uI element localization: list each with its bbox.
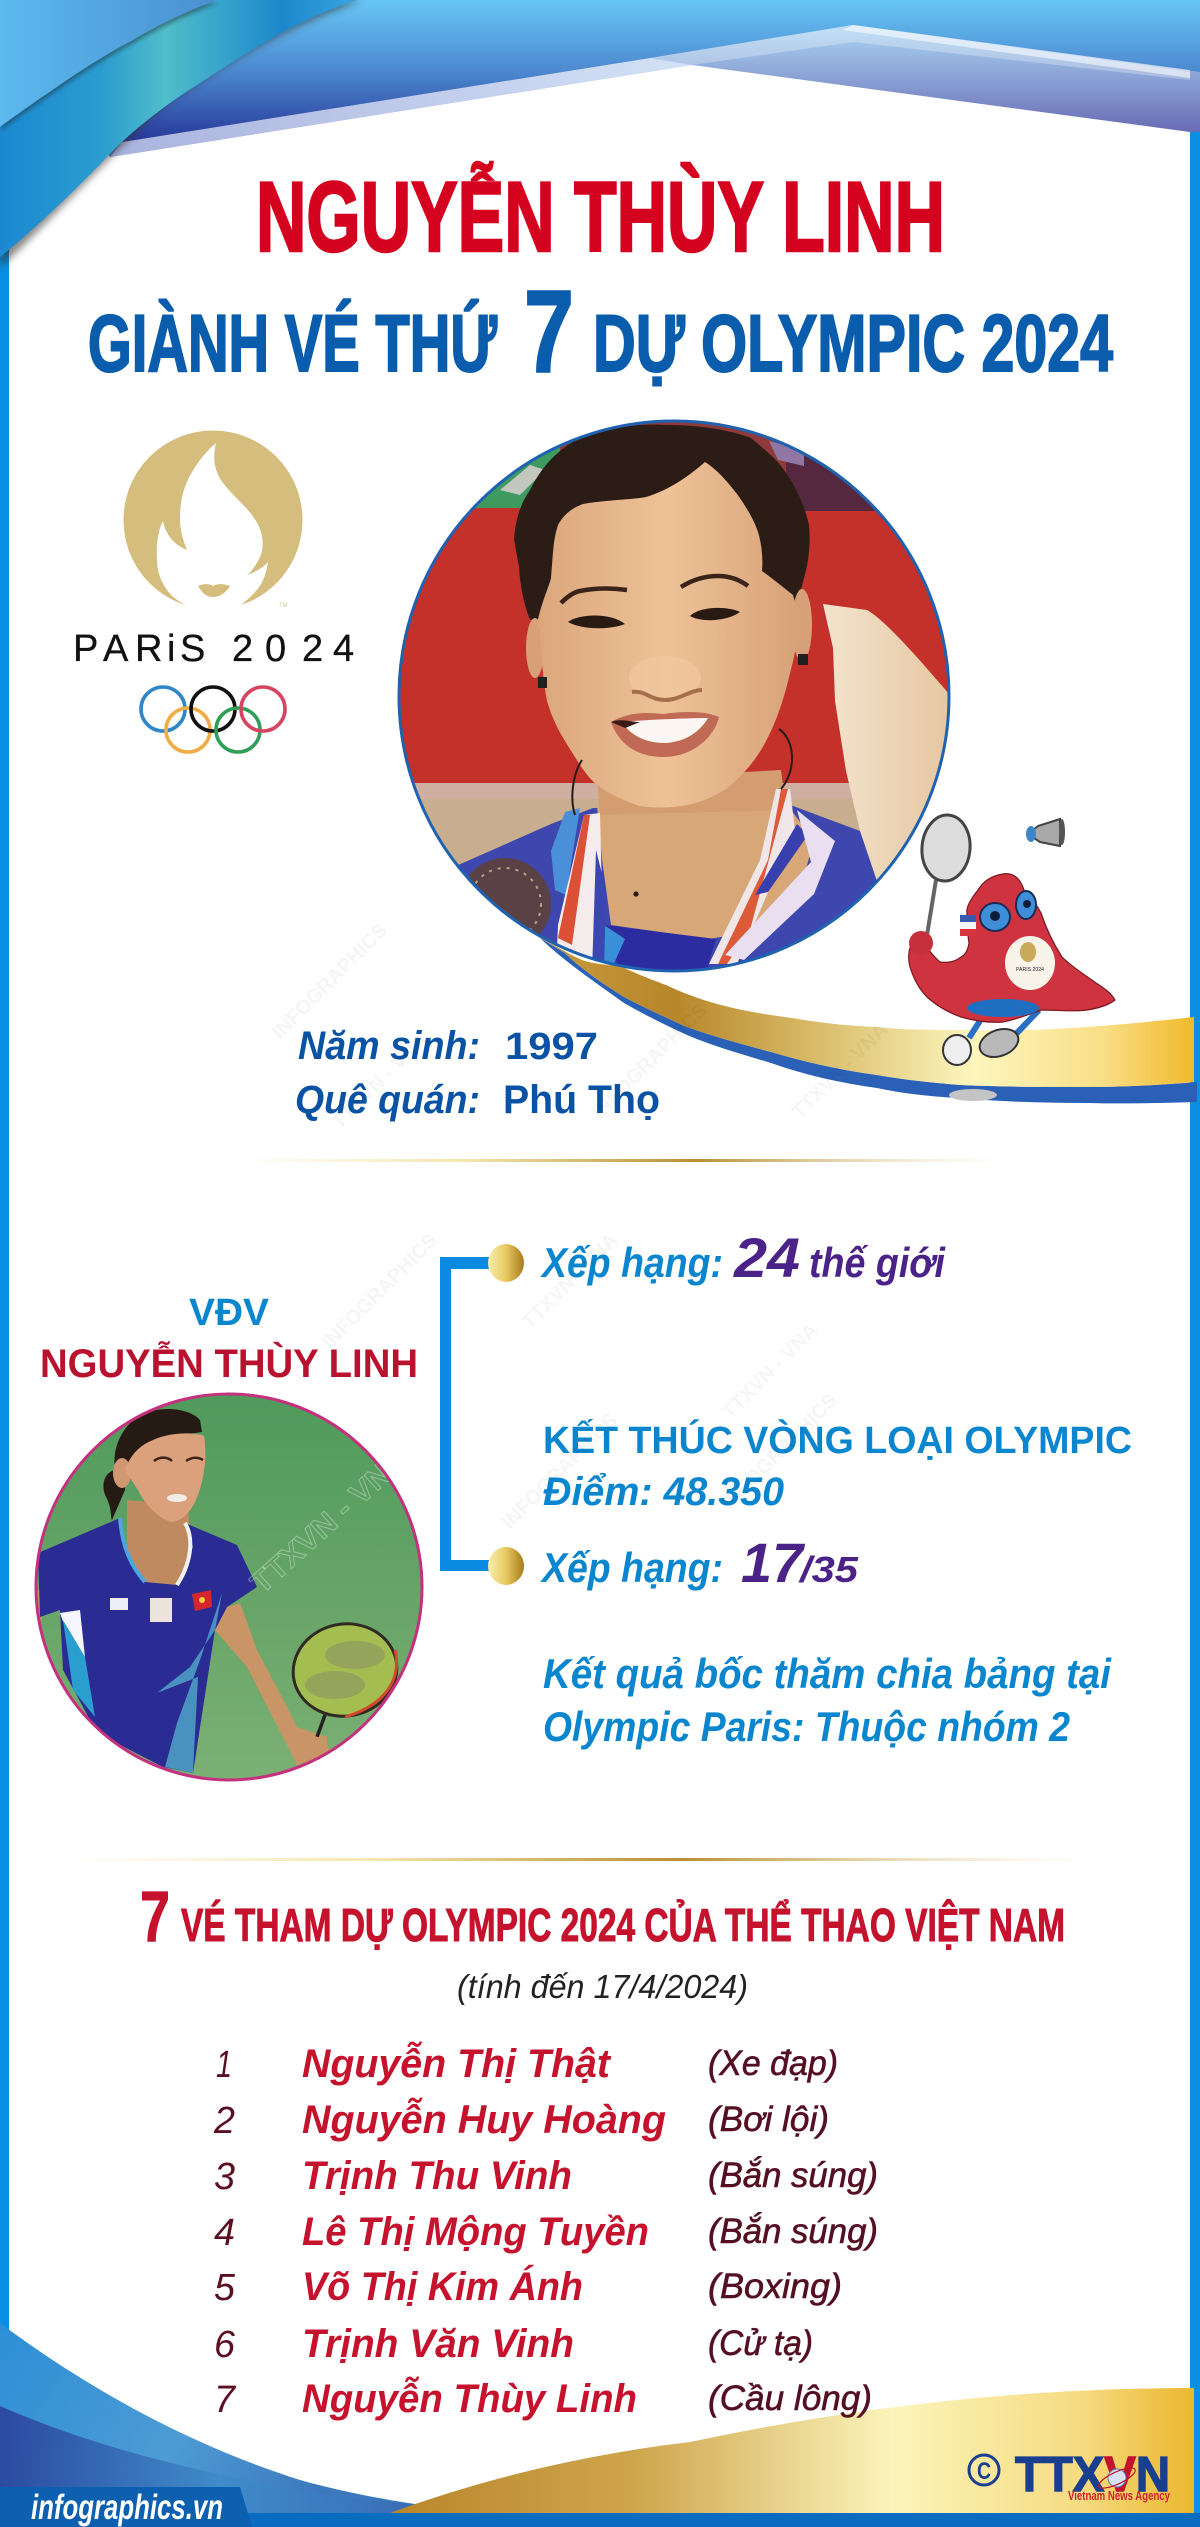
cockade — [960, 915, 976, 936]
watermarks: INFOGRAPHICS — [498, 1410, 622, 1534]
row 3: Trịnh Thu Vinh — [302, 2154, 572, 2198]
qualifying result: /35 — [798, 1549, 859, 1590]
draw result — [543, 1650, 1112, 1750]
row 5: 5 — [214, 2267, 236, 2309]
athlete heading — [40, 1292, 418, 1386]
watermarks — [268, 920, 892, 1534]
personal information: Quê quán: — [295, 1078, 480, 1122]
row 6 — [214, 2322, 813, 2366]
qualifying result: Điểm: 48.350 — [543, 1470, 784, 1514]
row 4: Lê Thị Mộng Tuyền — [302, 2210, 649, 2254]
row 7: Nguyễn Thùy Linh — [302, 2375, 637, 2421]
list heading: (tính đến 17/4/2024) — [457, 1968, 748, 2005]
row 5 — [214, 2264, 842, 2309]
list heading — [140, 1878, 1065, 2005]
row 4 — [214, 2210, 878, 2254]
portrait photo — [399, 421, 949, 972]
qualifying result — [540, 1418, 1132, 1594]
row 2: Nguyễn Huy Hoàng — [302, 2096, 666, 2142]
gold swoosh with blue edge — [540, 938, 1197, 1103]
title — [88, 161, 1113, 397]
mascot: Phryge with racket — [909, 813, 1115, 1065]
body — [909, 874, 1115, 1022]
bracket connector — [440, 1244, 524, 1585]
divider — [233, 1159, 1006, 1162]
athletes list — [213, 2040, 878, 2421]
watermarks: TTXVN - VNA — [718, 1319, 822, 1424]
row 6: (Cử tạ) — [708, 2324, 813, 2363]
watermarks: INFOGRAPHICS — [268, 920, 392, 1044]
title: GIÀNH VÉ THỨ — [88, 298, 498, 389]
draw result: Olympic Paris: Thuộc nhóm 2 — [543, 1703, 1070, 1750]
row 5: Võ Thị Kim Ánh — [302, 2264, 583, 2309]
row 4: 4 — [214, 2212, 235, 2254]
shoes — [943, 1024, 1022, 1065]
watermarks: TTXVN - VNA — [518, 1229, 622, 1334]
flame emblem: TM — [279, 603, 288, 609]
world ranking: thế giới — [809, 1239, 946, 1286]
world ranking: Xếp hạng: — [540, 1239, 723, 1286]
row 7: 7 — [214, 2379, 237, 2421]
TTXVN logo: TTXVN — [1015, 2448, 1170, 2502]
world ranking — [540, 1226, 946, 1289]
qualifying result: 17 — [741, 1531, 806, 1594]
watermarks: INFOGRAPHICS — [588, 1000, 712, 1124]
badge — [1005, 936, 1055, 990]
row 6: 6 — [214, 2324, 236, 2366]
row 5: (Boxing) — [708, 2267, 842, 2306]
badge: PARIS 2024 — [1016, 967, 1044, 973]
row 4: (Bắn súng) — [708, 2212, 878, 2251]
row 7: (Cầu lông) — [708, 2379, 872, 2418]
athlete heading: NGUYỄN THÙY LINH — [40, 1340, 418, 1386]
TTXVN logo: C — [977, 2458, 991, 2485]
row 6: Trịnh Văn Vinh — [302, 2322, 574, 2366]
watermarks: INFOGRAPHICS — [318, 1230, 442, 1354]
personal information: Phú Thọ — [503, 1078, 660, 1122]
action photo: TTXVN - VNA — [245, 1442, 415, 1600]
website tab: infographics.vn — [31, 2488, 223, 2527]
row 2: (Bơi lội) — [708, 2100, 829, 2139]
Olympic rings — [141, 687, 285, 752]
row 1: 1 — [216, 2044, 232, 2086]
qualifying result: KẾT THÚC VÒNG LOẠI OLYMPIC — [543, 1418, 1132, 1462]
row 1 — [216, 2040, 838, 2086]
watermarks: TTXVN - VNA — [328, 1029, 432, 1134]
row 3 — [214, 2154, 878, 2198]
athlete heading: VĐV — [189, 1292, 270, 1334]
draw result: Kết quả bốc thăm chia bảng tại — [543, 1650, 1112, 1697]
top header decoration — [0, 0, 1200, 268]
divider — [65, 1858, 1094, 1861]
action photo — [36, 1394, 422, 1780]
bottom decoration — [0, 2323, 1200, 2527]
row 1: (Xe đạp) — [708, 2044, 838, 2083]
shuttlecock — [1026, 819, 1065, 846]
row 2: 2 — [213, 2100, 235, 2142]
Paris 2024 logo — [73, 430, 354, 752]
watermarks: INFOGRAPHICS — [718, 1390, 842, 1514]
Paris 2024 wordmark: PARiS 2024 — [73, 628, 354, 670]
legs — [969, 1005, 1039, 1038]
row 3: (Bắn súng) — [708, 2156, 878, 2195]
title: 7 — [524, 266, 574, 397]
personal information: Năm sinh: — [298, 1024, 480, 1068]
personal information — [295, 1024, 660, 1122]
personal information: 1997 — [505, 1026, 598, 1068]
row 2 — [213, 2096, 829, 2142]
row 7 — [214, 2375, 872, 2421]
racket — [919, 813, 973, 935]
qualifying result: Xếp hạng: — [540, 1544, 723, 1591]
flame emblem — [124, 430, 302, 612]
row 1: Nguyễn Thị Thật — [302, 2040, 612, 2086]
world ranking: 24 — [733, 1226, 800, 1289]
row 3: 3 — [214, 2156, 235, 2198]
eyes — [980, 891, 1036, 931]
watermarks: TTXVN - VNA — [788, 1019, 892, 1124]
list heading: 7 — [140, 1878, 170, 1957]
